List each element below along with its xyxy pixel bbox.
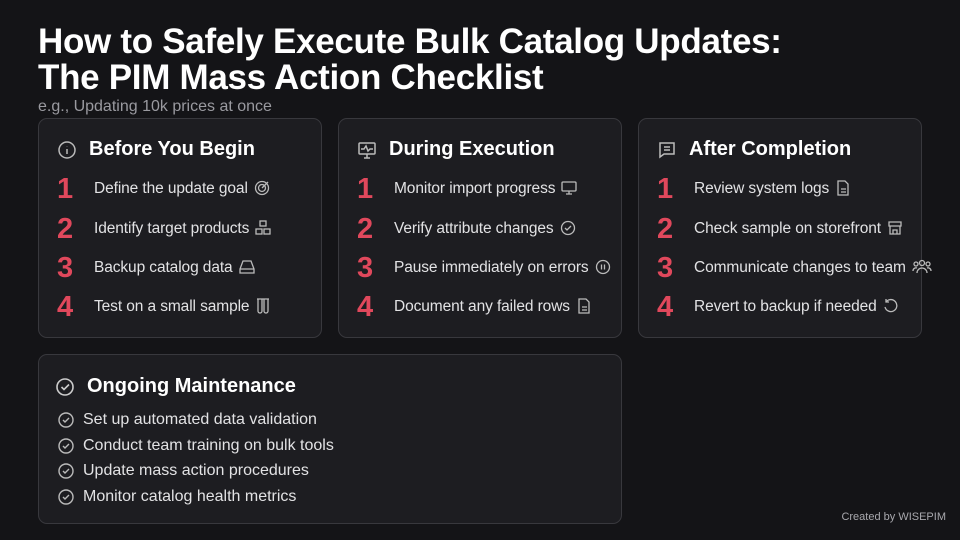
- check 1: Set up automated data validation: [83, 411, 317, 428]
- item 1: Monitor import progress: [394, 180, 555, 197]
- heading: Before You Begin: [89, 138, 255, 160]
- item 3: 3: [657, 252, 673, 284]
- panel: ongoing maintenance: [38, 354, 622, 524]
- heading: After Completion: [689, 138, 851, 160]
- item 4: [657, 290, 898, 322]
- item 4: 4: [57, 290, 73, 322]
- item 3: 3: [57, 252, 73, 284]
- check 3: Update mass action procedures: [83, 462, 309, 479]
- item 2: 2: [657, 212, 673, 244]
- item 4: Revert to backup if needed: [694, 298, 877, 315]
- title: The PIM Mass Action Checklist: [38, 58, 543, 97]
- heading: During Execution: [389, 138, 555, 160]
- item 2: 2: [357, 212, 373, 244]
- item 3: [57, 252, 255, 284]
- item 3: Backup catalog data: [94, 259, 233, 276]
- item 1: Define the update goal: [94, 180, 248, 197]
- item 4: Document any failed rows: [394, 298, 570, 315]
- item 2: Check sample on storefront: [694, 220, 881, 237]
- item 1: 1: [657, 172, 673, 204]
- title: [38, 22, 782, 97]
- panel: before you begin: [38, 118, 322, 338]
- item 4: Test on a small sample: [94, 298, 249, 315]
- item 4: 4: [357, 290, 373, 322]
- item 1: [657, 172, 849, 204]
- item 1: [57, 172, 270, 204]
- item 1: Review system logs: [694, 180, 829, 197]
- item 3: 3: [357, 252, 373, 284]
- item 2: 2: [57, 212, 73, 244]
- item 2: [357, 212, 576, 244]
- subtitle: e.g., Updating 10k prices at once: [38, 98, 272, 115]
- footer credit: Created by WISEPIM: [841, 511, 946, 523]
- check 4: Monitor catalog health metrics: [83, 488, 296, 505]
- item 3: [357, 252, 610, 284]
- item 2: Verify attribute changes: [394, 220, 554, 237]
- item 4: [357, 290, 590, 322]
- item 2: [57, 212, 271, 244]
- item 1: 1: [357, 172, 373, 204]
- title: How to Safely Execute Bulk Catalog Updates:: [38, 22, 782, 61]
- item 4: 4: [657, 290, 673, 322]
- panel: during execution: [338, 118, 622, 338]
- item 4: [57, 290, 269, 322]
- check 2: Conduct team training on bulk tools: [83, 437, 334, 454]
- item 1: [357, 172, 577, 204]
- item 3: Pause immediately on errors: [394, 259, 589, 276]
- panel: after completion: [638, 118, 922, 338]
- item 3: [657, 252, 932, 284]
- item 2: [657, 212, 902, 244]
- item 2: Identify target products: [94, 220, 249, 237]
- heading: Ongoing Maintenance: [87, 375, 296, 397]
- item 1: 1: [57, 172, 73, 204]
- item 3: Communicate changes to team: [694, 259, 906, 276]
